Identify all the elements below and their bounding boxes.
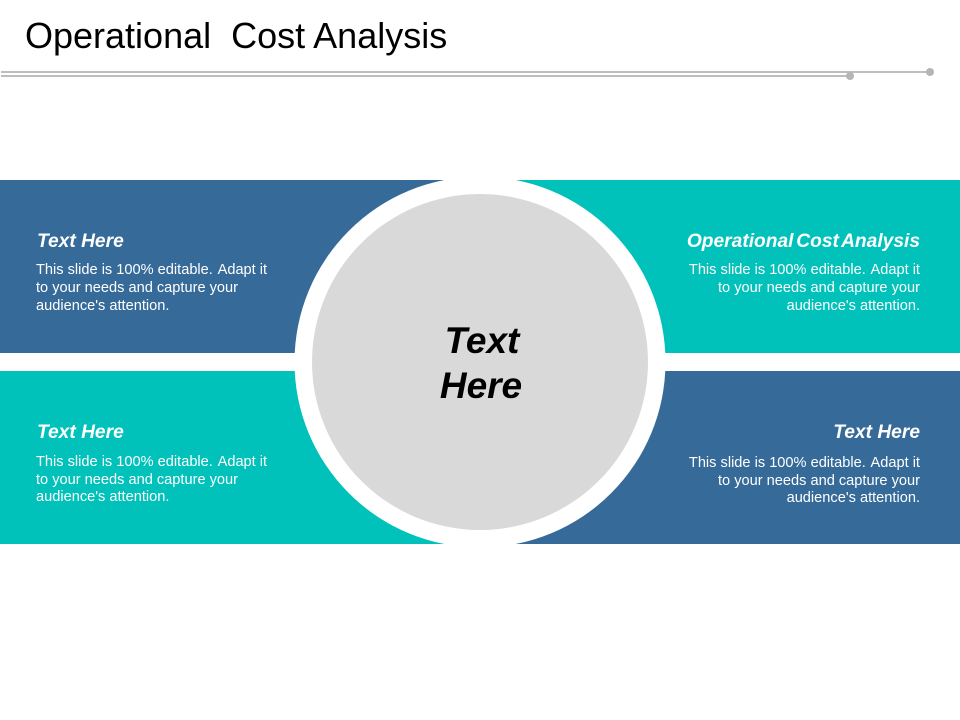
panel: bottom left [0,371,480,544]
text block: top left: audience's attention. [36,298,169,314]
text block: bottom left: Text Here [37,422,124,443]
text block: top right: audience's attention. [787,298,920,314]
text block: top left: Adapt it [214,262,267,278]
text block: top right: Operational Cost Analysis [687,231,920,252]
text block: top right: This slide is 100% editable. [689,262,866,278]
centre text: Here [440,365,522,406]
text block: bottom right: This slide is 100% editable. [689,455,866,471]
text block: top left: Text Here [37,231,124,252]
title: Operational Cost Analysis [25,15,447,56]
text block: bottom left: Adapt it [214,454,267,470]
text block: bottom left: audience's attention. [36,489,169,505]
text block: top left [36,231,267,314]
text block: bottom left [36,422,267,505]
text block: bottom right: audience's attention. [787,490,920,506]
text block: bottom left: to your needs and capture your [36,472,238,488]
text block: bottom left: This slide is 100% editable. [36,454,213,470]
text block: top left: This slide is 100% editable. [36,262,213,278]
centre circle [312,194,648,530]
panel: top right [480,180,960,353]
panel: top left [0,180,480,353]
text block: top right [687,231,920,314]
text block: bottom right [689,422,920,506]
centre text: Text [445,320,521,361]
text block: bottom right: Text Here [833,422,920,443]
header rule with dots [1,68,934,80]
text block: top left: to your needs and capture your [36,280,238,296]
text block: top right: Adapt it [867,262,920,278]
panel: bottom right [480,371,960,544]
text block: bottom right: Adapt it [867,455,920,471]
text block: bottom right: to your needs and capture your [718,473,920,489]
text block: top right: to your needs and capture your [718,280,920,296]
white circle ring [294,176,666,548]
